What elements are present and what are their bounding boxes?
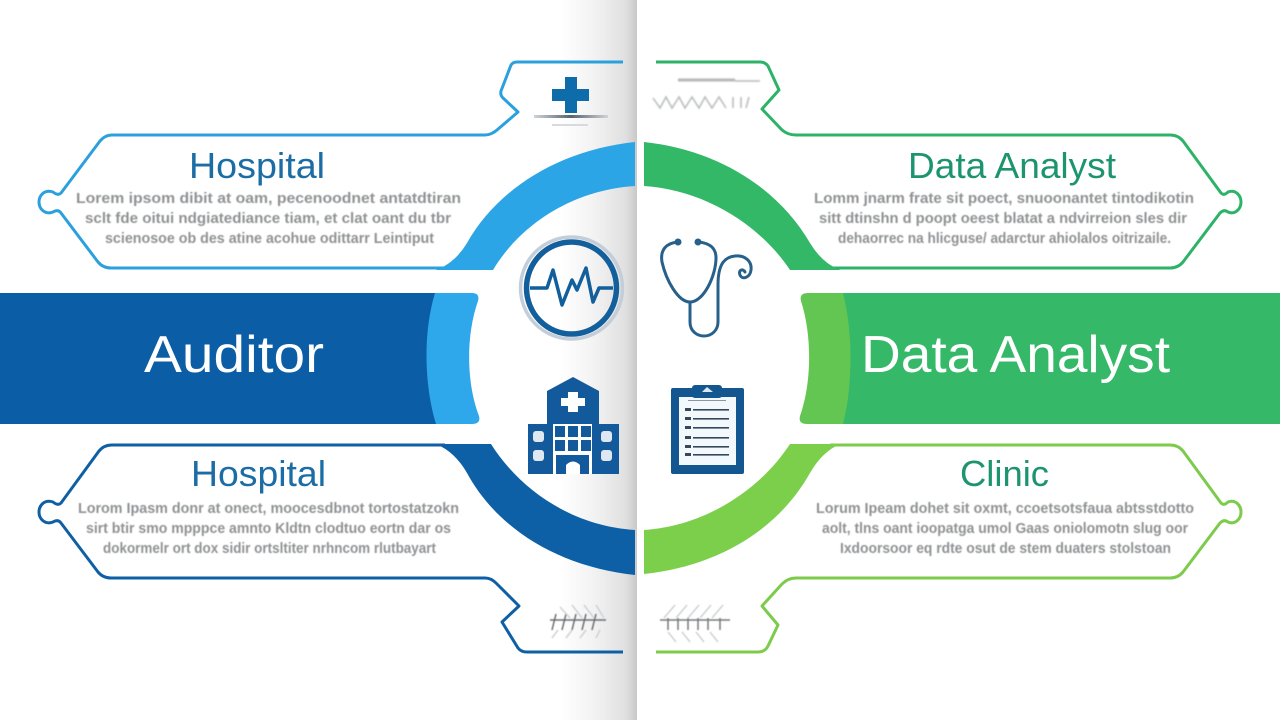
text block: Lorem ipsom dibit at oam, pecenoodnet antatdtiran: [76, 191, 461, 207]
icon: stethoscope: [662, 240, 751, 336]
heading: Hospital: Hospital: [191, 453, 326, 494]
text block: aolt, tlns oant ioopatga umol Gaas oniolomotn slug oor: [822, 521, 1188, 537]
text block: [78, 501, 459, 557]
heading: Clinic: Clinic: [960, 453, 1049, 494]
ring arc: top right green: [644, 142, 840, 270]
text block: scienosoe ob des atine acohue odittarr Leintiput: [105, 231, 434, 247]
ring arc: top left light blue: [436, 142, 635, 270]
text block: sirt btir smo mpppce amnto Kldtn clodtuo eortn dar os: [86, 521, 451, 537]
text block: sitt dtinshn d poopt oeest blatat a ndvirreion sles dir: [819, 211, 1187, 227]
label: Data Analyst: Data Analyst: [861, 326, 1171, 384]
icon: clipboard: [671, 385, 744, 474]
heading: Hospital: Hospital: [189, 145, 325, 186]
panel: top left Hospital: [39, 62, 623, 268]
panel: bottom left Hospital: [39, 445, 623, 652]
central grey spine: [560, 0, 637, 720]
decorative smudge marks: [660, 605, 730, 642]
band: Data Analyst: [800, 293, 1280, 424]
ring arc: bottom right lime: [644, 444, 840, 574]
text block: dehaorrec na hlicguse/ adarctur ahiolalos oitrizaile.: [838, 231, 1171, 247]
top left outline: [39, 62, 623, 268]
ring arc: bottom left dark blue: [436, 444, 635, 575]
top right outline: [656, 62, 1241, 268]
decorative smudge marks: [653, 80, 760, 108]
text block: dokormelr ort dox sidir ortsltiter nrhncom rlutbayart: [103, 541, 436, 557]
band: Auditor: [0, 293, 479, 424]
band accent: light green segment: [800, 293, 850, 424]
text block: [816, 501, 1194, 557]
text block: [814, 191, 1194, 247]
icon: heartbeat monitor: [520, 237, 622, 339]
band accent: light blue segment: [426, 293, 479, 424]
bottom left outline: [39, 445, 623, 652]
icon: hospital building: [528, 377, 619, 474]
decorative smudge marks: [550, 605, 606, 638]
icon: cross: [534, 77, 608, 126]
text block: Lomm jnarm frate sit poect, snuoonantet tintodikotin: [814, 191, 1194, 207]
text block: Lorom Ipasm donr at onect, moocesdbnot tortostatzokn: [78, 501, 459, 517]
panel: top right Data Analyst: [653, 62, 1241, 268]
panel: bottom right Clinic: [656, 445, 1241, 652]
text block: [76, 191, 461, 247]
text block: sclt fde oitui ndgiatediance tiam, et clat oant du tbr: [85, 211, 451, 227]
heading: Data Analyst: Data Analyst: [908, 145, 1116, 186]
bottom right outline: [656, 445, 1241, 652]
text block: Lorum Ipeam dohet sit oxmt, ccoetsotsfaua abtsstdotto: [816, 501, 1194, 517]
label: Auditor: Auditor: [144, 326, 324, 384]
text block: Ixdoorsoor eq rdte osut de stem duaters stolstoan: [840, 541, 1171, 557]
